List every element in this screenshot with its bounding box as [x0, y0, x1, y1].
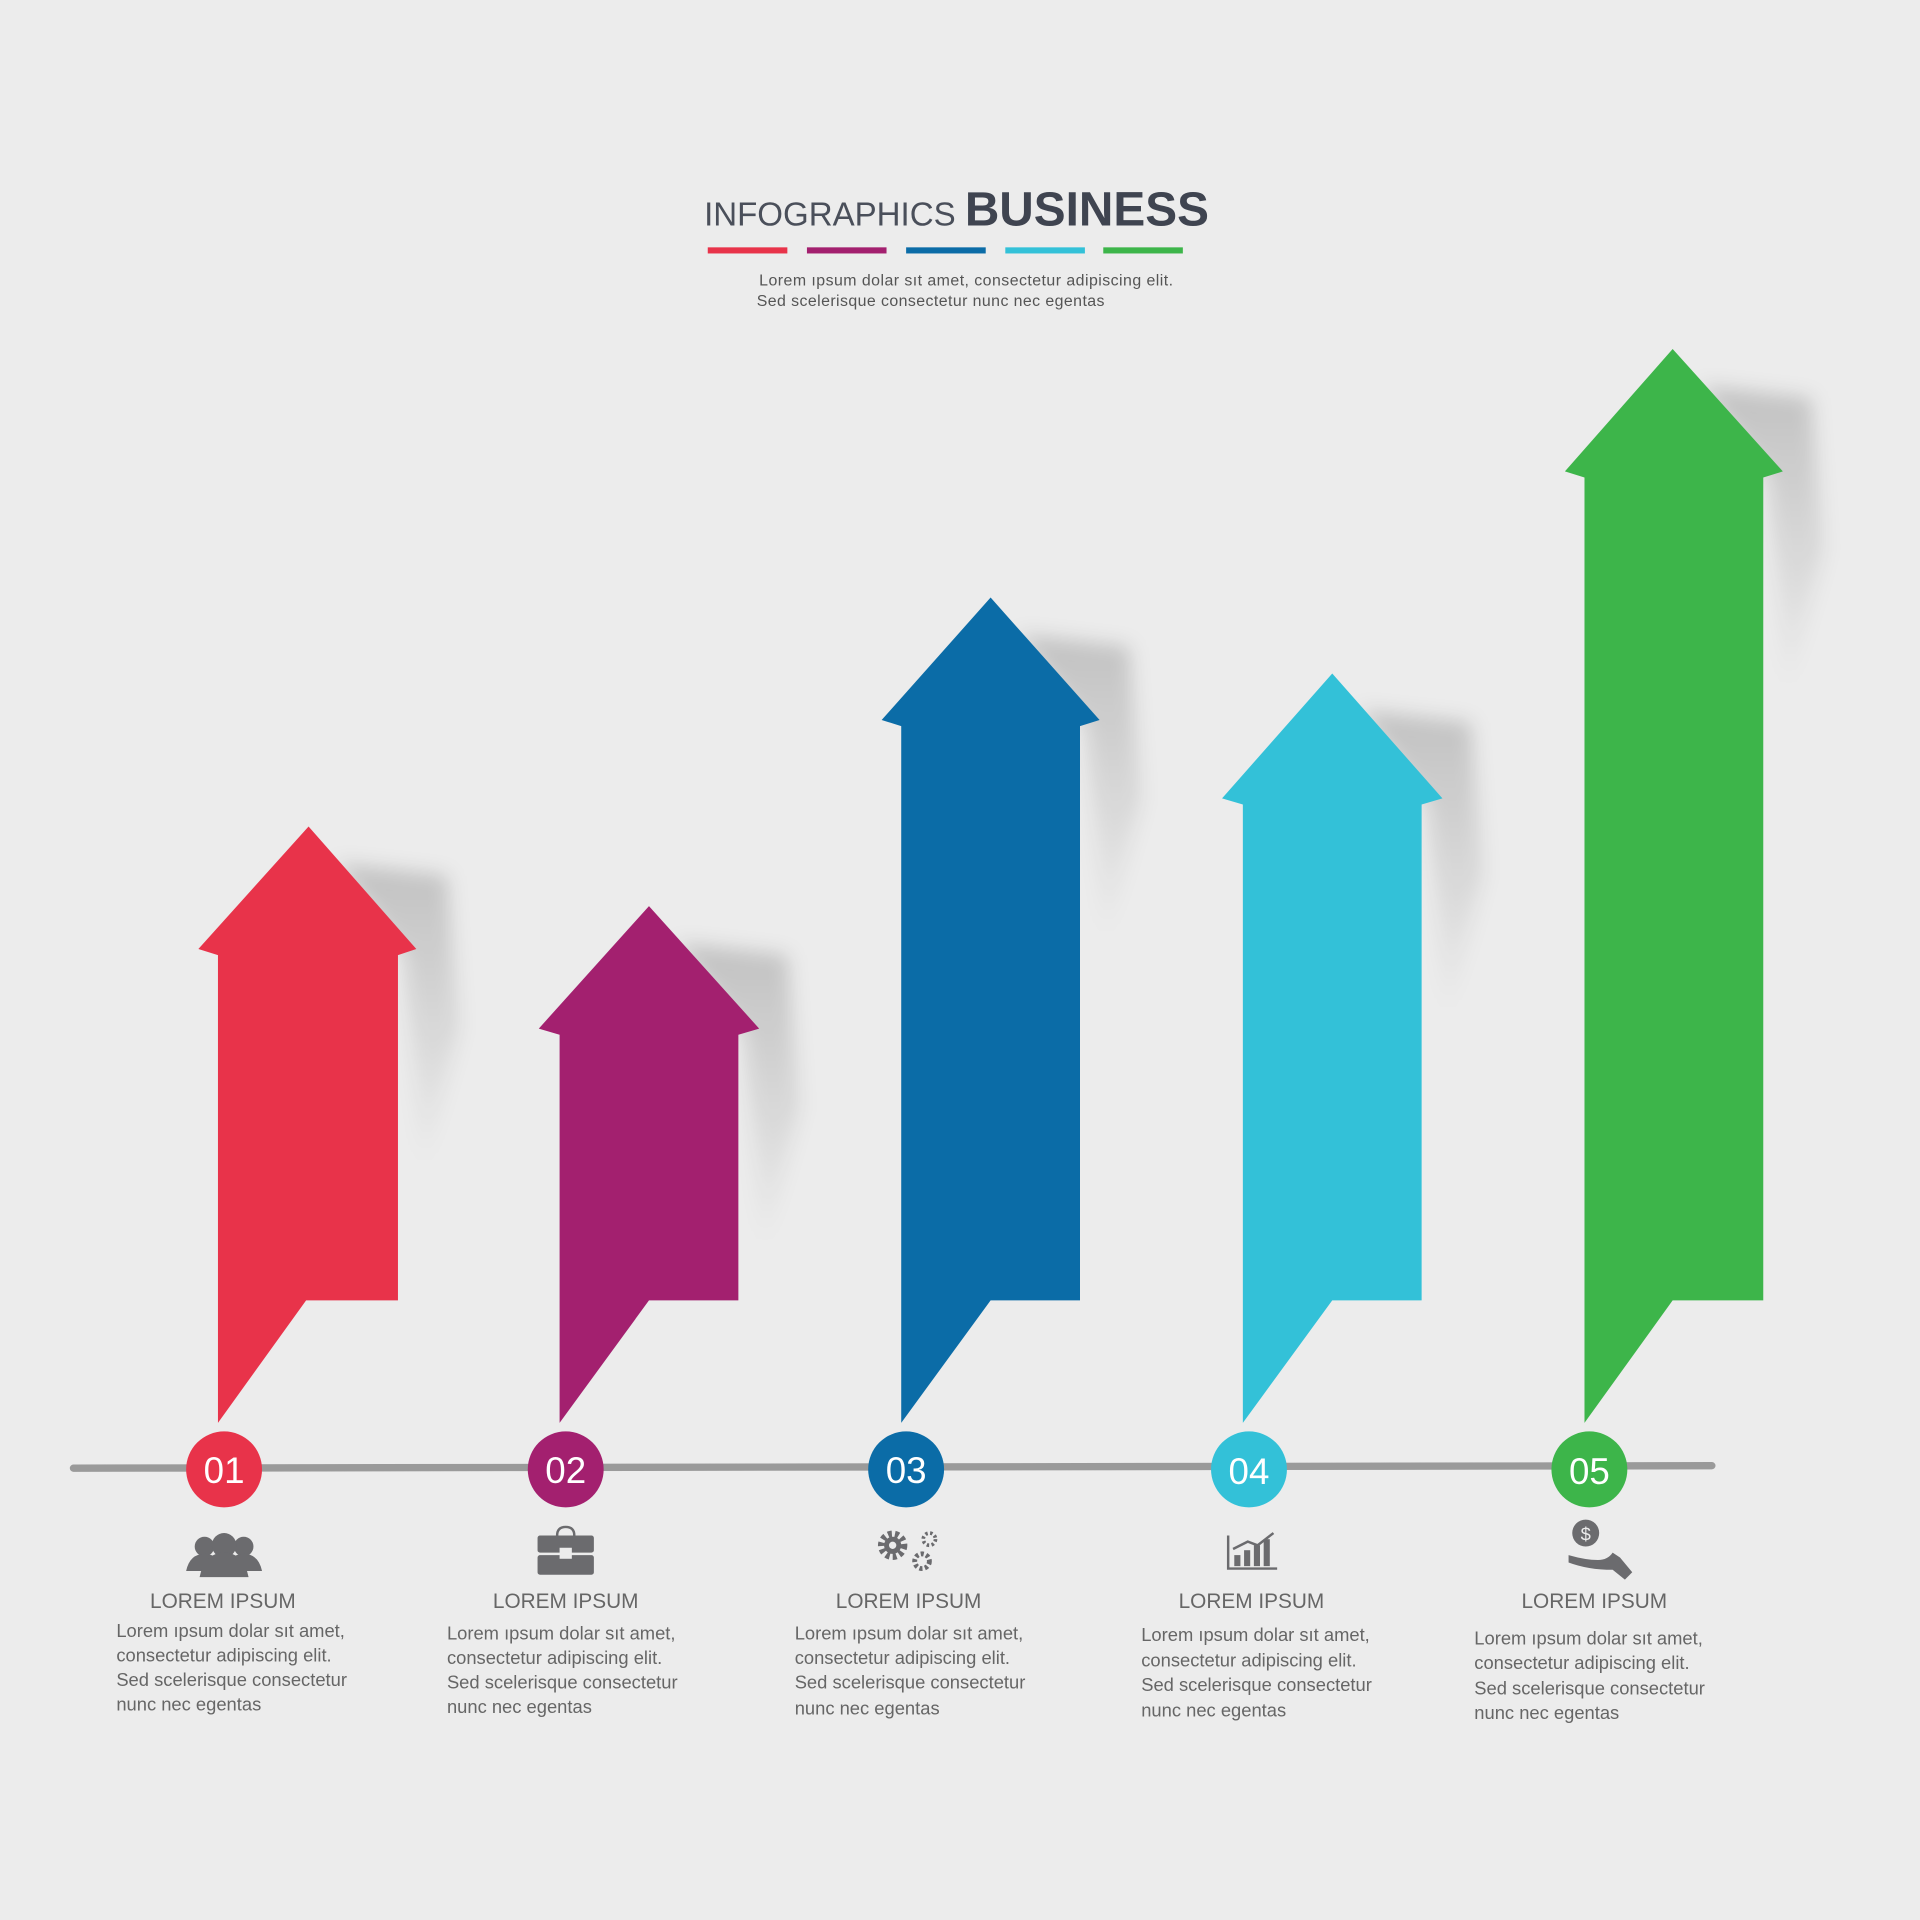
body texts: Lorem ıpsum dolar sıt amet, — [116, 1620, 345, 1641]
body texts — [116, 1620, 1705, 1723]
body texts: consectetur adipiscing elit. — [116, 1645, 332, 1666]
arrow shadows — [337, 386, 1823, 1255]
arrow 1 red — [198, 827, 416, 1423]
subtitle: Lorem ıpsum dolar sıt amet, consectetur adipiscing elit. — [759, 272, 1173, 289]
body texts: consectetur adipiscing elit. — [795, 1647, 1010, 1668]
body texts: Sed scelerisque consectetur — [447, 1672, 678, 1693]
body texts: Lorem ıpsum dolar sıt amet, — [1141, 1624, 1370, 1645]
number circles — [186, 1431, 1627, 1507]
icon: gears — [882, 1533, 936, 1569]
number circles: 03 — [886, 1450, 927, 1491]
labels: LOREM IPSUM — [1179, 1590, 1324, 1613]
body texts: Sed scelerisque consectetur — [795, 1672, 1025, 1693]
body texts: nunc nec egentas — [116, 1694, 261, 1715]
body texts: nunc nec egentas — [1141, 1700, 1286, 1721]
arrow 2 purple — [539, 906, 759, 1423]
body texts: consectetur adipiscing elit. — [447, 1647, 662, 1668]
number circles: 02 — [545, 1450, 586, 1491]
subtitle: Sed scelerisque consectetur nunc nec egentas — [757, 293, 1105, 310]
labels: LOREM IPSUM — [836, 1590, 981, 1613]
number circles: 01 — [204, 1450, 245, 1491]
icon: chart — [1228, 1533, 1277, 1569]
arrow 4 cyan — [1222, 673, 1442, 1423]
subtitle — [757, 272, 1173, 310]
labels: LOREM IPSUM — [1521, 1590, 1667, 1613]
body texts: Sed scelerisque consectetur — [1474, 1678, 1705, 1699]
icon: money hand: $ — [1581, 1523, 1591, 1544]
body texts: nunc nec egentas — [795, 1697, 940, 1718]
arrow 5 green — [1565, 349, 1783, 1423]
body texts: Sed scelerisque consectetur — [116, 1669, 347, 1690]
body texts: nunc nec egentas — [447, 1696, 592, 1717]
number circles: 04 — [1229, 1451, 1269, 1492]
timeline line — [73, 1466, 1712, 1468]
body texts: consectetur adipiscing elit. — [1474, 1652, 1690, 1673]
labels — [150, 1590, 1667, 1613]
arrow 3 blue — [882, 598, 1100, 1423]
body texts: nunc nec egentas — [1474, 1702, 1619, 1723]
icon: money hand — [1569, 1520, 1632, 1580]
labels: LOREM IPSUM — [150, 1590, 296, 1613]
body texts: Lorem ıpsum dolar sıt amet, — [1474, 1627, 1703, 1648]
number circles: 05 — [1569, 1451, 1610, 1492]
body texts: Lorem ıpsum dolar sıt amet, — [447, 1623, 676, 1644]
body texts: consectetur adipiscing elit. — [1141, 1650, 1357, 1671]
title: INFOGRAPHICS BUSINESS — [704, 183, 1209, 236]
body texts: Sed scelerisque consectetur — [1141, 1674, 1372, 1695]
icon: people — [186, 1533, 262, 1577]
labels: LOREM IPSUM — [493, 1590, 639, 1613]
icon: briefcase — [538, 1527, 594, 1575]
body texts: Lorem ıpsum dolar sıt amet, — [795, 1623, 1023, 1644]
